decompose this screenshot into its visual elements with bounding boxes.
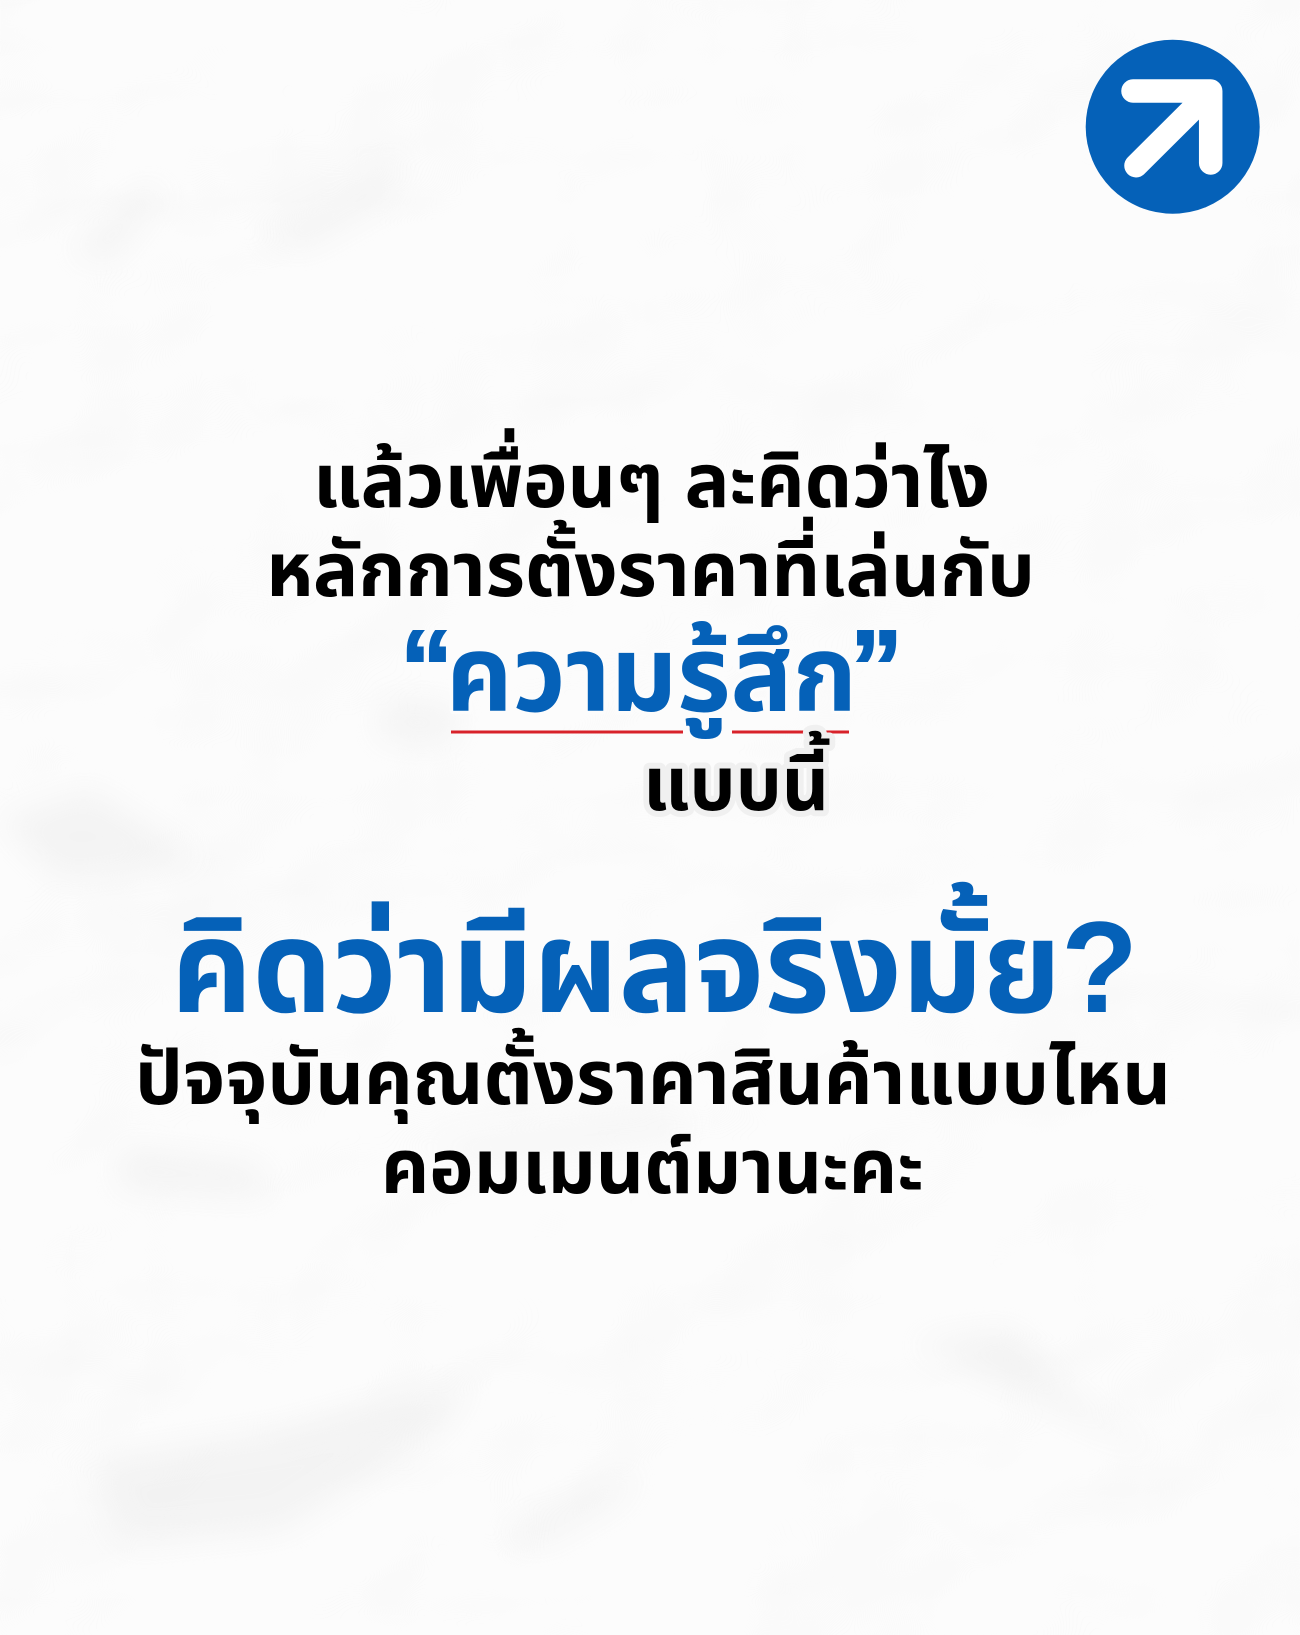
- heading line 2: หลักการตั้งราคาที่เล่นกับ: [266, 517, 1035, 613]
- closing quote: ”: [850, 609, 903, 727]
- sub question line 1: ปัจจุบันคุณตั้งราคาสินค้าแบบไหน: [135, 1028, 1171, 1124]
- heading line 4: แบบนี้: [643, 731, 830, 827]
- highlighted word with red underline: [400, 609, 903, 739]
- logo: blue circle with arrow: [1086, 40, 1260, 214]
- big question: คิดว่ามีผลจริงมั้ย?: [171, 882, 1138, 1040]
- sub question line 2: คอมเมนต์มานะคะ: [381, 1125, 924, 1210]
- word: ความรู้สึก: ความรู้สึก: [446, 616, 857, 739]
- heading line 1: แล้วเพื่อนๆ ละคิดว่าไง: [313, 428, 990, 524]
- opening quote: “: [400, 609, 453, 727]
